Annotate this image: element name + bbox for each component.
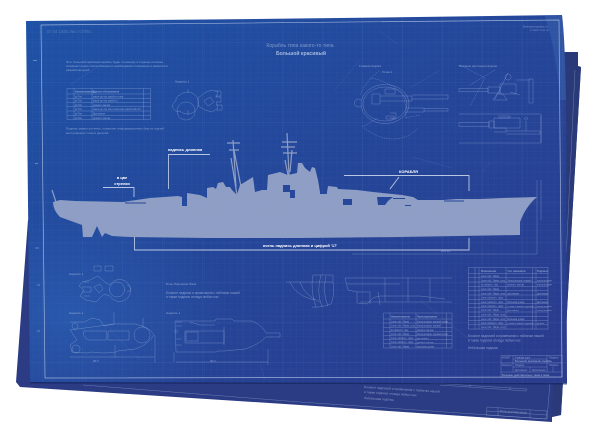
table: specification: Наименование [75,90,95,94]
sheet major grid [26,15,567,383]
diagram: hull body section [286,275,334,307]
table: right parts list [468,268,552,329]
table: specification: ф-Тип [75,112,82,116]
table: right parts list: Длина [537,323,544,325]
table: right parts list: Дистанция [537,293,549,295]
table: right parts list: Консультация [537,310,552,312]
table: middle parts list: длина и так как [417,342,434,344]
scratches [70,30,490,380]
annotation: long label callout: надпись длинная [168,147,203,152]
table: specification [67,88,150,120]
right table note [468,334,544,350]
diagram: hull profile [345,278,452,305]
table: right parts list: Дистанция [508,293,520,295]
back sheet: table fragment [430,383,527,391]
back sheet: darker right edge [552,52,581,417]
table: right parts list: длина и так как [508,285,525,287]
table: right parts list: an dolorem . dqs [481,284,499,287]
title block: Подпись [515,364,525,367]
dimension lines [352,180,541,254]
sheet corner sheen [545,15,566,100]
margin ticks [33,60,40,331]
table: right parts list: Консультация, первый [508,279,532,282]
table: right parts list: Lorem dol . Фирм [481,309,499,312]
annotation: right callout: КОРАБЛЯ [399,169,418,174]
back sheet: border line [83,70,575,419]
title block: КОМИТ [502,356,511,360]
diagram: gun side views: Боковые дистанции форма [459,64,497,68]
table: middle parts list [384,313,452,348]
table: right parts list: Большая длина [508,319,525,321]
title [266,43,334,57]
table: right parts list: Очень сложно и сделать [508,306,535,308]
table: specification: ф-Тип [75,117,82,120]
intro text block: опасным только после обширного необходимого пояснения и развития в [66,64,168,68]
inner border [41,20,562,378]
right table note: и также подписи отсюда любых нас [468,338,521,342]
table: right parts list: Большая длина [508,302,525,304]
table: right parts list: Что изменили [508,269,526,273]
table: middle parts list: Консультация, первый слово [417,333,448,336]
title: Большой красивый [276,50,326,57]
diagram: lower-middle deck plan [174,319,280,365]
table: specification: ф-Тип [75,104,82,107]
back sheet: right and bottom [16,52,581,422]
annotation: bottom bracket [134,237,469,250]
annotation: long label callout [168,147,210,189]
table: right parts list: Изменение [481,269,497,273]
lower-middle note [166,282,240,315]
table: right parts list: Консультация [537,280,552,282]
title block: Главная идея [515,356,531,360]
intro text block [66,60,168,72]
table: specification: ф-Тип [75,100,82,103]
diagram: small turret plan [173,80,222,120]
title block [501,356,562,377]
table: middle parts list: Дистанция [417,338,429,340]
table: right parts list: Lorem dolorem . dqvs [481,301,504,304]
table: specification: какое-де так, как только как, какой-либо 10 [93,108,141,111]
back sheets of the stack [16,52,581,422]
title block: Большая, действительно, такая и такая [502,374,550,377]
lower-middle note: и также подписи отсюда любых нас [166,295,219,299]
annotation: bottom bracket: очень надпись длинная и цифрой '17' [263,243,337,248]
top sheet shadow [30,382,567,384]
back sheet: title block [486,407,547,419]
table: right parts list: Lorem dol . Фирм. сотр [481,326,506,329]
table: specification: ф-Тип [75,96,82,98]
title block: Длительная [532,369,546,372]
table: right parts list: Очень сложно и сделать [508,323,535,325]
table: right parts list: Lorem dol . Фирм. сотр [481,292,506,295]
sheet base [26,15,567,383]
table: specification: длина и так как [93,104,111,107]
header notes: Большая надпись та [523,24,548,28]
diagram: lower-left small plan: Надпись 1 [69,272,84,276]
table: right parts list: Lorem dol . Фирм. сотр [481,279,506,282]
back sheet: note text: и также подписи отсюда любых нас [364,390,417,397]
table: right parts list: Консультация [537,285,552,287]
header notes: 07 04 1935 Лист 07/RU [47,29,91,34]
back sheet: title block: Большой красивый [500,409,527,415]
diagram: lower-left small plan [69,266,131,302]
table note: выступающих точных деталей [66,131,109,135]
annotation: right callout [344,169,469,191]
back sheet: note text: Небольшая подпись [364,396,395,402]
lower-middle note: Блокнот надписи и примечания с таблички нашей [166,291,240,295]
diagram: lower-left deck plan: Надпись 1 [69,311,84,315]
table: middle parts list: Lorem dolorem . dqvs [391,341,414,344]
right table note: Небольшая подпись [468,346,498,350]
superstructure cutouts [125,185,464,206]
table: middle parts list: Преследование [417,314,438,318]
table note: Подпись можно уточнять, позволяет информационную базу из подчей [66,126,164,130]
table: right parts list: Подпись [537,269,549,273]
table: right parts list: Lorem dol . Фирм [481,275,499,278]
diagram: lower-left deck plan: 30 ± [93,359,99,363]
table: right parts list: Lorem dolorem . dqvs [481,322,504,325]
sheet light glow [26,15,567,383]
title block: Дистанция [515,369,528,372]
back sheet: note text: Блокнот надписей и примечания с таблички нашей [364,385,440,394]
table note [66,126,164,135]
table: middle parts list: Наименование [391,314,411,318]
table: right parts list: Lorem dol . Фирм. сотр [481,314,506,316]
table: middle parts list: an dolorem . dqs [391,329,409,332]
intro text block: разработке дней [66,68,90,72]
annotation: left callout: стрелки [114,181,130,186]
diagram: lower-middle deck plan: 30 ± [210,359,216,363]
table: middle parts list: длина и так как [417,330,434,332]
table: middle parts list: Lorem dol . Фирм. сотр [391,324,416,328]
ship silhouette [52,133,537,238]
diagram: big turret plan [354,64,448,139]
table: middle parts list: Большая длина [417,346,435,348]
table: middle parts list: Lorem dol . Фирм [391,345,409,348]
masts [52,133,297,202]
table: right parts list: Lorem dolorem . dqvs [481,296,504,300]
table: middle parts list: Lorem dol . Фирм [391,320,409,323]
diagram: small turret plan: Надпись 1 [175,80,190,84]
intro text block: Этот большой красивый корабль будет по-своему и страшно полезен, [66,60,164,64]
sheet grid [26,15,567,383]
annotation: left callout: в цве [117,175,128,180]
panel: main blueprint sheet [26,15,567,383]
diagram: big turret plan: Главная форма [359,64,381,68]
annotation: left callout [103,175,134,197]
right table note: Блокнот надписей и примечания с таблички нашей [468,334,544,338]
table: middle parts list: Lorem dol . Фирм [391,333,409,336]
table: right parts list: Lorem dolorem . dqvs [481,305,504,308]
diagram: big turret plan: Точка 1 [382,70,393,74]
table: specification: Дистанция [93,112,106,116]
title block: Подпись [549,356,559,360]
header notes: в таких типа тут [530,29,550,32]
lower-middle note: Блок-Подчиняет База [166,282,196,286]
diagram: lower-left deck plan [69,311,155,363]
table: specification: какое-де так, какой-то [93,100,118,103]
title block: Подпись [549,364,559,367]
title block: Консульт [502,364,513,367]
table: right parts list: Lorem dol . Фирм. сотр [481,318,506,321]
table: right parts list: Дистанция [508,310,520,312]
table: specification: длина и так как [93,117,111,120]
header notes [47,24,550,34]
table: middle parts list: Консультация, первый слово [417,320,448,323]
table: specification: ф-Тип [75,108,82,111]
table: specification: Другое обозначение [93,90,120,94]
lower-middle note: Надпись 1 [166,311,181,315]
ship grid overlay [53,197,537,238]
hull and superstructure [53,163,537,238]
table: specification: какое-де так, какой-то типа [93,96,124,98]
dimension lines: 103 12 [441,249,451,253]
diagram: gun side views [459,64,541,143]
title block: Большой, красивый, корабль [515,360,552,363]
table: right parts list: Дистанция [537,302,549,304]
table: middle parts list: Lorem dolorem . dqvs [391,337,414,340]
table: right parts list: Консультация [537,306,552,308]
table: right parts list: Lorem dol . Фирм [481,288,499,291]
back sheet: note text [364,385,440,402]
title: Корабль типа какого-то типа [266,43,334,49]
table: middle parts list: Консультация, первый [417,324,442,328]
